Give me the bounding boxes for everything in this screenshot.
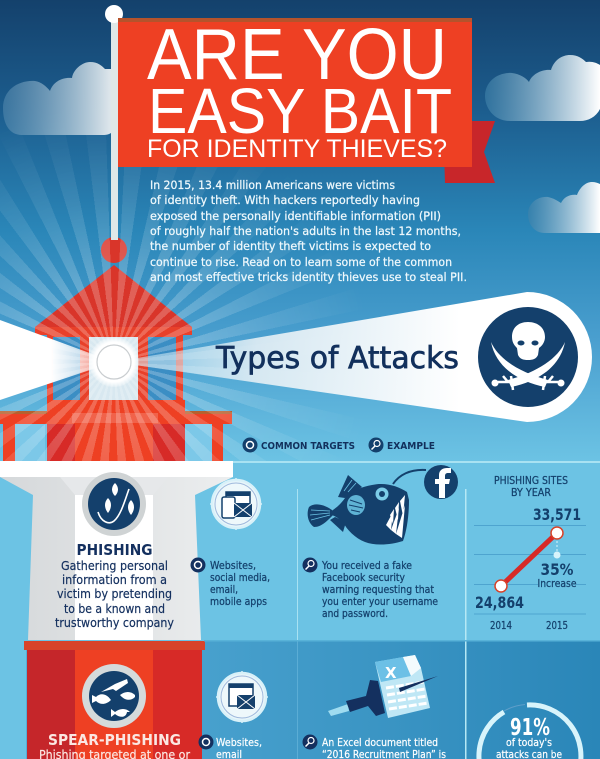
phishing example: you enter your username — [322, 596, 438, 608]
icon: phishing badge — [82, 472, 146, 536]
cloud: lower right — [528, 182, 600, 233]
icon: excel document and spear — [328, 655, 438, 718]
data point: 2014 — [495, 580, 507, 592]
icon: example marker — [302, 734, 318, 750]
phishing example: Facebook security — [322, 572, 405, 584]
chart title: PHISHING SITES — [494, 475, 568, 487]
chart: phishing sites by year — [474, 475, 586, 632]
title text: EASY BAIT — [148, 75, 452, 147]
title text: ARE YOU — [147, 15, 447, 95]
intro paragraph: the number of identity theft victims is expected to — [150, 239, 431, 253]
chart title: BY YEAR — [511, 487, 551, 499]
icon: skull and swords — [478, 307, 578, 407]
cloud: upper right — [485, 55, 600, 121]
lighthouse tower — [0, 461, 233, 759]
light rays — [0, 143, 322, 461]
light beam left — [0, 320, 114, 400]
lighthouse top — [0, 237, 232, 461]
heading: spear-phishing: SPEAR-PHISHING — [48, 731, 181, 749]
spear-phishing example: An Excel document titled — [322, 737, 438, 749]
intro paragraph — [150, 178, 467, 284]
phishing targets: Websites, — [210, 560, 256, 572]
phishing description: trustworthy company — [55, 615, 175, 630]
phishing example — [321, 560, 438, 620]
chart title — [494, 475, 568, 499]
icon: email target — [216, 671, 268, 723]
lamp — [89, 337, 139, 387]
spear-phishing example — [322, 737, 446, 759]
icon: example — [368, 438, 384, 452]
value: 24,864: 24,864 — [475, 593, 524, 612]
phishing targets — [210, 560, 270, 608]
icon: excel document and spear: X — [385, 664, 397, 682]
ribbon tail — [443, 121, 495, 183]
data line — [501, 533, 557, 586]
data point: 2015 — [551, 527, 563, 539]
title text: FOR IDENTITY THIEVES? — [147, 135, 447, 163]
panel: phishing row background — [0, 461, 600, 641]
intro paragraph: and most effective tricks identity thieves use to steal PII. — [150, 270, 467, 284]
phishing example: You received a fake — [321, 560, 412, 572]
phishing description — [55, 558, 175, 630]
value: 33,571: 33,571 — [533, 505, 581, 524]
phishing example: and password. — [322, 608, 388, 620]
icon: spear-phishing badge — [82, 664, 146, 728]
legend — [242, 438, 435, 452]
title text — [147, 15, 452, 163]
heading: phishing: PHISHING — [76, 541, 152, 559]
axis labels: 2015 — [546, 620, 568, 632]
phishing description: information from a — [62, 572, 167, 587]
value: 35% increase — [538, 560, 576, 590]
phishing description: Gathering personal — [61, 558, 168, 573]
intro paragraph: exposed the personally identifiable information (PII) — [150, 209, 441, 223]
icon: example marker — [302, 558, 318, 572]
intro paragraph: of identity theft. With hackers reportedly having — [150, 193, 420, 207]
legend label: common targets: COMMON TARGETS — [261, 441, 355, 452]
intro paragraph: In 2015, 13.4 million Americans were victims — [150, 178, 395, 192]
intro paragraph: continue to rise. Read on to learn some of the common — [150, 255, 452, 269]
spear-phishing targets — [216, 737, 262, 759]
icon: target marker — [198, 734, 214, 750]
stat: 91 percent — [479, 704, 581, 759]
legend label: example: EXAMPLE — [387, 441, 435, 452]
spear-phishing targets: Websites, — [216, 737, 262, 749]
axis labels — [490, 620, 568, 632]
phishing targets: social media, — [210, 572, 270, 584]
stat: 91 percent: of today's — [506, 737, 552, 749]
stat: 91 percent: 91% — [510, 715, 550, 741]
icon: common targets — [242, 438, 258, 452]
flag pole — [105, 5, 123, 240]
cloud: left — [3, 62, 111, 135]
phishing example: warning requesting that — [322, 584, 434, 596]
icon: target marker — [190, 558, 206, 572]
icon: anglerfish with facebook lure — [308, 465, 458, 545]
value: 35% increase: 35% — [540, 560, 574, 579]
phishing description: to be a known and — [64, 601, 165, 616]
phishing description: victim by pretending — [57, 586, 172, 601]
icon: devices target — [210, 478, 262, 530]
light beam right — [114, 292, 592, 422]
title banner — [118, 15, 472, 167]
axis labels: 2014 — [490, 620, 512, 632]
intro paragraph: of roughly half the nation's adults in the last 12 months, — [150, 224, 461, 238]
phishing targets: email, — [210, 584, 238, 596]
value: 35% increase: Increase — [538, 578, 576, 590]
phishing targets: mobile apps — [210, 596, 267, 608]
panel: spear-phishing row background — [0, 641, 600, 759]
heading: types of attacks: Types of Attacks — [215, 341, 459, 376]
